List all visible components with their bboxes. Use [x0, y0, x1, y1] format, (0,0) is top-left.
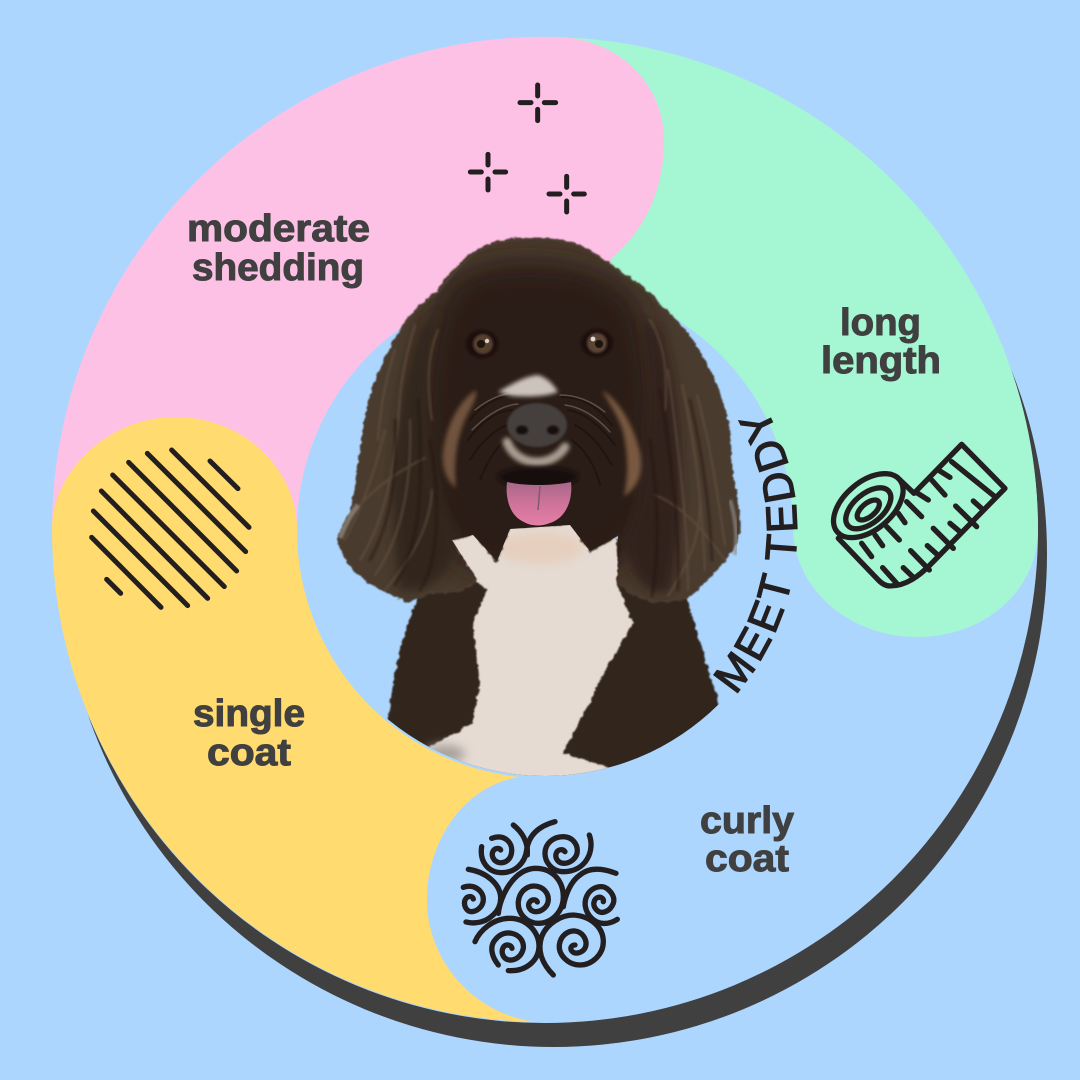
label: moderate shedding: shedding	[192, 247, 364, 289]
mouth	[498, 467, 578, 487]
dog head and ears	[337, 237, 740, 603]
label: long length	[821, 302, 941, 382]
left eye	[466, 330, 498, 358]
panel: single coat (yellow)	[52, 417, 540, 1022]
panel: moderate shedding (pink)	[52, 37, 664, 530]
label: moderate shedding: moderate	[187, 208, 370, 250]
chin fur	[507, 442, 565, 462]
inner right ear shadow	[625, 320, 681, 593]
muzzle highlights	[472, 393, 610, 432]
dark ear strands	[370, 390, 712, 596]
label: long length: long	[840, 302, 921, 344]
grey ear tips	[340, 505, 358, 538]
icon: curls	[463, 822, 617, 975]
label: single coat: coat	[207, 732, 291, 774]
nose	[507, 403, 567, 447]
label: curly coat	[700, 800, 794, 880]
left muzzle tan	[443, 390, 476, 488]
tongue	[507, 482, 571, 525]
label: single coat: single	[193, 693, 305, 735]
dog chest	[428, 525, 635, 776]
dog body	[386, 525, 720, 776]
panel: long length (green)	[545, 37, 1038, 637]
label: moderate shedding	[187, 208, 370, 289]
photo: dog	[337, 237, 740, 800]
neck tan	[496, 532, 584, 564]
inner left ear shadow	[393, 310, 456, 591]
dark forehead and face	[420, 261, 657, 576]
right muzzle tan	[602, 390, 641, 496]
label: curly coat: curly	[700, 800, 794, 842]
curved title: MEET TEDDY	[713, 417, 798, 694]
head shading	[393, 261, 681, 593]
right ear tip	[730, 500, 736, 555]
label: single coat	[193, 693, 305, 774]
right eye	[581, 329, 613, 357]
ear fur strands	[345, 320, 725, 596]
icon: tape measure	[822, 444, 1005, 586]
icon: sparkles	[470, 85, 584, 212]
label: long length: length	[821, 340, 941, 382]
label: curly coat: coat	[705, 838, 789, 880]
icon: hatched circle	[92, 450, 249, 607]
muzzle fur	[468, 396, 615, 485]
nose streak	[498, 375, 558, 397]
